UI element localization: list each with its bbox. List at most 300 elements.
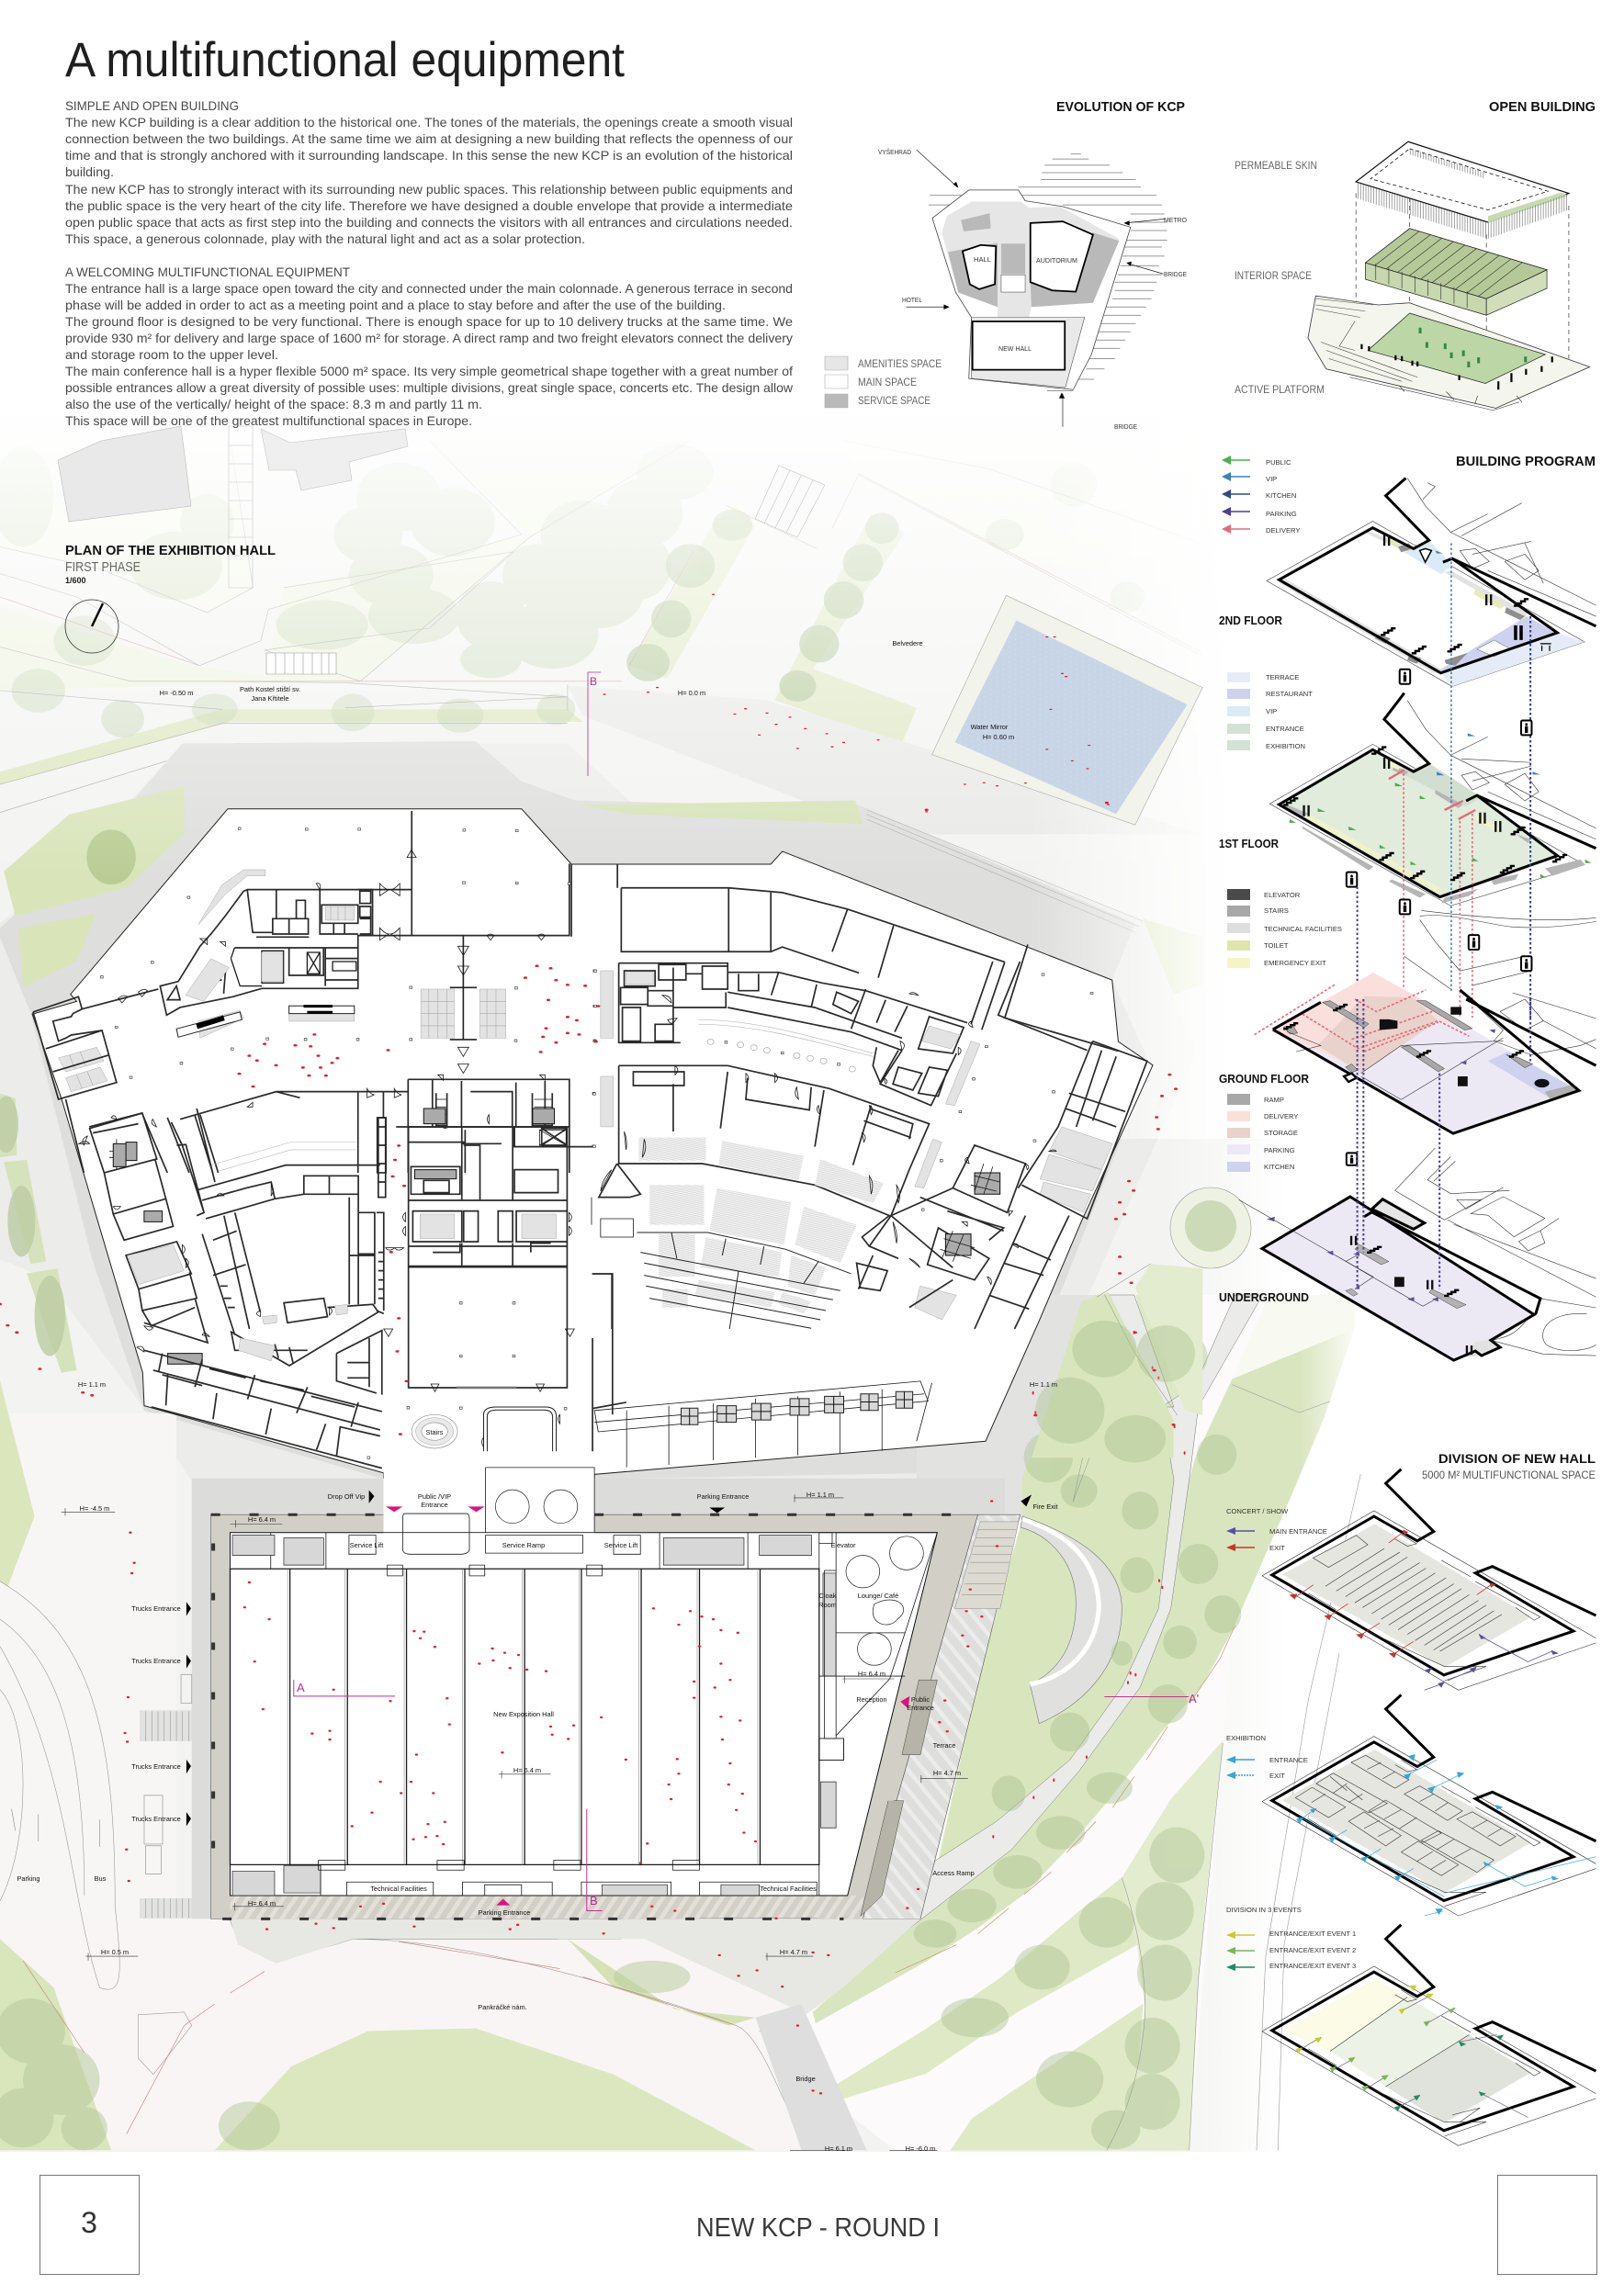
curved corridor walls [673, 962, 1088, 1106]
event three field [1386, 2035, 1531, 2123]
plan heading [65, 543, 276, 585]
round plaza basin [483, 1407, 557, 1462]
heading: division of new hall: DIVISION OF NEW HALL [1438, 1452, 1596, 1466]
underground ramp grey [1346, 1244, 1466, 1309]
section line A prime [1104, 1695, 1189, 1697]
delivery truck icon [1450, 1007, 1461, 1015]
division legends: EXHIBITION [1226, 1734, 1266, 1742]
dark toilet block [945, 1173, 1000, 1255]
legend: circulation: KITCHEN [1266, 491, 1296, 500]
exhibition stands [1295, 1755, 1516, 1875]
people [1361, 344, 1552, 389]
fins right [1488, 193, 1569, 239]
seating [638, 1138, 884, 1313]
floor labels: 2ND FLOOR [1219, 613, 1283, 627]
text block: a welcoming multifunctional equipment: phase will be added in order to act as a meeting point and a place to stay before and after the use of the building. [65, 298, 726, 312]
legend: ground floor program: STORAGE [1264, 1129, 1298, 1137]
legend: ground floor program: RAMP [1264, 1096, 1284, 1104]
pillars [211, 1543, 215, 1858]
parking entrance label: Parking Entrance [479, 1908, 530, 1917]
exit icon [1400, 900, 1410, 914]
outline [932, 190, 1131, 389]
legend: circulation: DELIVERY [1266, 526, 1300, 535]
paved ground [0, 404, 1624, 2152]
lawn north-east corner [1232, 1295, 1355, 1379]
stair ladder [229, 426, 253, 588]
terrace table icon [1540, 644, 1551, 651]
evolution labels: AUDITORIUM [1036, 256, 1077, 264]
heading: division of new hall [1422, 1452, 1596, 1481]
trucks entrance label: Trucks Entrance [131, 1657, 181, 1665]
legend: facilities: STAIRS [1264, 906, 1289, 915]
interior volume top [1365, 229, 1547, 298]
delivery vertical route two [1459, 821, 1460, 1018]
grey forecourt and colonnade [0, 741, 1202, 1481]
division legends: ENTRANCE/EXIT EVENT 1 [1269, 1930, 1356, 1938]
blue vertical route [1450, 543, 1452, 993]
bus label: Bus [95, 1874, 107, 1883]
level label: H= 0.0 m [678, 689, 705, 697]
path name label: Path Kostel stiští sv. [240, 685, 300, 693]
public entrance label second line: Entrance [421, 1501, 448, 1509]
2nd floor terrace [1441, 633, 1585, 686]
ground floor notch [1344, 1074, 1357, 1082]
east lawns and paths [804, 1295, 1360, 2150]
technical facilities label: Technical Facilities [370, 1885, 427, 1893]
platform edge [1349, 377, 1522, 411]
plaza below [231, 1919, 920, 2015]
legend: ground floor program [1227, 1094, 1298, 1172]
lawn beside hall [938, 1295, 1174, 1861]
door marks [79, 1115, 574, 1446]
2nd floor technical strips [1279, 531, 1528, 673]
service lift label: Service Lift [350, 1541, 383, 1549]
public entrance label: Public [911, 1695, 930, 1704]
text block: a welcoming multifunctional equipment: possible entrances allow a great diversity of possible uses: multiple divisions, great single space, concerts etc. The design allow [65, 381, 793, 395]
diagonal lobby wall [66, 890, 412, 1173]
plan heading: FIRST PHASE [65, 559, 141, 575]
service strip north [231, 1468, 832, 1569]
paved path with people [568, 686, 1202, 834]
level label: H= 1.1 m [78, 1380, 106, 1389]
square name label: Pankráčké nám. [478, 2003, 527, 2011]
delivery vertical route one [1403, 773, 1404, 996]
underground annex [1371, 1199, 1425, 1229]
ramp stairs south [700, 1522, 1019, 1934]
west block shell [160, 890, 373, 1015]
wing corridor walls [172, 1109, 386, 1335]
upper hall [412, 811, 570, 936]
west lobby walls [336, 1274, 626, 1469]
bridge label: Bridge [795, 2075, 816, 2083]
lounge label: Lounge/ Café [858, 1592, 898, 1600]
level label: H= 4.7 m [780, 1948, 807, 1956]
roof inner opening [1370, 149, 1548, 209]
active platform [1308, 296, 1590, 408]
neighbouring buildings [58, 426, 191, 522]
fade overlay right upper [1029, 404, 1624, 1139]
legend: facilities: EMERGENCY EXIT [1264, 959, 1326, 967]
parking icon [1458, 1076, 1468, 1086]
stair icons [1283, 599, 1567, 880]
evolution legend: MAIN SPACE [858, 377, 917, 388]
event one heads [1295, 1986, 1434, 2054]
lawn strip six [951, 2004, 1144, 2150]
text block: a welcoming multifunctional equipment: also the use of the vertically/ height of the space: 8.3 m and partly 11 m. [65, 398, 482, 411]
division legends: ENTRANCE/EXIT EVENT 3 [1269, 1962, 1356, 1970]
floor labels [1219, 613, 1310, 1304]
east road base [804, 1295, 1263, 2150]
evolution labels: HALL [974, 255, 991, 264]
interior volume side right [1486, 270, 1547, 315]
core left [619, 963, 727, 1042]
lounge tables two [890, 1536, 923, 1570]
grey lobby stairs [601, 971, 1112, 1320]
event dividers [1330, 1997, 1480, 2122]
south ramp [355, 1919, 621, 1939]
evolution labels: BRIDGE [1164, 270, 1187, 278]
elevator icon [1347, 872, 1357, 887]
corridor ticks [220, 1127, 386, 1308]
level label: H= 6.4 m [513, 1766, 541, 1774]
2nd floor stairs grey [1375, 543, 1525, 666]
west corner block [33, 996, 117, 1099]
top pillars [211, 1514, 978, 1919]
toilet icons underground [1350, 1236, 1472, 1355]
east road red edges [896, 1626, 1235, 1973]
level label: H= 6.1 m [825, 2144, 852, 2153]
hall [963, 245, 996, 289]
amenities area [942, 202, 1119, 318]
heading: open building: OPEN BUILDING [1489, 99, 1596, 115]
seating rows [1325, 1548, 1502, 1651]
water mirror label: Water Mirror [971, 723, 1009, 731]
plaza round tables [495, 1490, 529, 1524]
section A label: A [297, 1681, 305, 1694]
exploded dashed guides [1356, 156, 1569, 396]
legend: upper floor program: TERRACE [1266, 673, 1299, 681]
plan heading: 1/600 [65, 576, 86, 585]
lawn north fork [1135, 1295, 1199, 1407]
lounge bar [873, 1600, 904, 1625]
stamp box [1497, 2175, 1596, 2274]
public arrows [1290, 782, 1591, 878]
white plaza in front [384, 1451, 594, 1568]
open building labels [1235, 161, 1325, 396]
kitchen vertical route [1529, 616, 1531, 1018]
open building labels: PERMEABLE SKIN [1235, 161, 1317, 172]
door pairs [319, 1565, 844, 1870]
underground slab [1262, 1197, 1534, 1360]
lawn parcels left [4, 786, 184, 917]
main entrance arrows [1425, 1636, 1552, 1690]
three events layout [1262, 1925, 1596, 2145]
pale columns [707, 1039, 855, 1072]
exhibition layout [1262, 1694, 1596, 1916]
text block: simple and open building: SIMPLE AND OPEN BUILDING [65, 99, 239, 113]
kitchen [1488, 1052, 1579, 1098]
footer band [0, 2152, 1624, 2296]
fins back [1408, 148, 1485, 179]
grey room stairs [128, 1214, 557, 1361]
section line B [587, 1809, 602, 1911]
1st floor toilet strip [1305, 759, 1500, 893]
section B label: B [590, 675, 597, 688]
division legends: EXIT [1269, 1544, 1285, 1552]
east grid [592, 1164, 1000, 1329]
roads [0, 1413, 176, 2150]
road lines [0, 441, 1202, 813]
legend: circulation: VIP [1266, 475, 1277, 483]
reception label: Reception [856, 1695, 887, 1704]
open building labels: INTERIOR SPACE [1235, 271, 1312, 282]
level label: H= -4.5 m [80, 1504, 109, 1513]
elevator icon [1521, 956, 1531, 971]
delivery arrows [1389, 770, 1475, 819]
round lawn tree [1185, 1200, 1236, 1252]
division legends: EXIT [1269, 1772, 1285, 1780]
south-west row block [144, 1350, 382, 1469]
east paths [896, 1295, 1263, 1940]
level label: H= 6.4 m [248, 1899, 276, 1908]
concert arrows [1296, 1531, 1493, 1655]
building footprint [32, 809, 1153, 1528]
bridge [755, 2004, 867, 2150]
pale plaza line [699, 1019, 873, 1056]
ground floor storage [1318, 996, 1438, 1074]
section B label: B [590, 1894, 598, 1908]
text block: a welcoming multifunctional equipment: This space will be one of the greatest multifunctional spaces in Europe. [65, 414, 472, 428]
circular ramp [1021, 1516, 1122, 1724]
legend: upper floor program: RESTAURANT [1266, 690, 1313, 698]
cars bus [12, 1674, 192, 1874]
parking label: Parking [17, 1874, 40, 1883]
left and south landscape [0, 1381, 813, 2150]
underground annex two [1466, 1340, 1500, 1357]
north compass [65, 600, 118, 653]
round stairs [412, 1414, 457, 1448]
toilets dark [113, 1109, 555, 1364]
elevator label: Elevator [830, 1541, 856, 1549]
2nd floor icons [1420, 548, 1431, 562]
belvedere label: Belvedere [892, 639, 923, 647]
escalator black bands [197, 1007, 333, 1028]
text block: a welcoming multifunctional equipment: The entrance hall is a large space open toward the city and connected under the main colonnade. A generous terrace in second [65, 282, 793, 296]
title: A multifunctional equipment [65, 33, 625, 87]
auditorium [1031, 221, 1093, 292]
new exposition hall label: New Exposition Hall [493, 1710, 554, 1718]
text block: simple and open building: The new KCP has to strongly interact with its surrounding new public spaces. This relationship between public equipments and [65, 183, 793, 197]
text block: a welcoming multifunctional equipment: and storage room to the upper level. [65, 348, 278, 362]
plan heading: PLAN OF THE EXHIBITION HALL [65, 543, 276, 558]
heading: building program: BUILDING PROGRAM [1456, 454, 1596, 469]
page number box: 3 [81, 2206, 97, 2239]
crossing and stairs [140, 1710, 206, 1919]
exhibition bays [231, 1569, 819, 1864]
elevator icon [1400, 670, 1410, 684]
ground floor top context [1404, 919, 1596, 1019]
lawn lower curve [1107, 1740, 1223, 2150]
lower hall [409, 1267, 567, 1388]
seating row lines [637, 1232, 851, 1329]
open building labels: ACTIVE PLATFORM [1235, 385, 1325, 396]
lower hall gate [457, 1387, 516, 1389]
south-west quadrant [79, 1109, 626, 1469]
trucks entrance label: Trucks Entrance [131, 1762, 181, 1771]
columns [593, 970, 1093, 1210]
legend: upper floor program [1227, 672, 1313, 750]
door marks [601, 993, 1056, 1285]
1st floor entrance [1401, 763, 1482, 806]
open building axonometric [1308, 141, 1590, 411]
division legends: ENTRANCE [1269, 1756, 1308, 1764]
level label: H= 6.4 m [858, 1670, 885, 1678]
level label: H= 6.4 m [248, 1515, 276, 1524]
event three heads [1394, 2035, 1504, 2111]
delivery vertical route three [1472, 814, 1473, 1018]
central bars [450, 936, 477, 1040]
upper stair [266, 653, 336, 674]
restaurant icon [1516, 625, 1521, 640]
1st floor grey patches [1280, 766, 1585, 903]
pale stair hatch [211, 1142, 356, 1171]
event two field [1330, 1997, 1469, 2087]
concert layout [1262, 1469, 1596, 1690]
floor labels: 1ST FLOOR [1219, 837, 1280, 850]
west block rooms [167, 890, 371, 1000]
service area [948, 213, 1119, 307]
south hatched arcade [231, 1896, 863, 1919]
platform steps [1315, 298, 1417, 381]
1st floor outer slab [1269, 744, 1585, 906]
platform green field [1368, 313, 1545, 384]
legend: ground floor program: KITCHEN [1264, 1163, 1294, 1171]
grey stairs [59, 870, 506, 1092]
black arrow markers [186, 1491, 1032, 1826]
evolution legend: SERVICE SPACE [858, 396, 930, 407]
building program floors lower [1239, 973, 1596, 1360]
path name second line: Jana Křtitele [251, 694, 289, 703]
2nd floor outer slab [1267, 522, 1585, 686]
vertical routes lower [1358, 999, 1530, 1289]
service lift label: Service Lift [604, 1541, 637, 1549]
evolution labels: NEW HALL [998, 344, 1032, 353]
east people [991, 1331, 1186, 1839]
hall interior [231, 1533, 937, 1896]
1st floor context lines [1407, 701, 1596, 928]
text block: simple and open building: time and that is strongly anchored with it surrounding landscape. In this sense the new KCP is an evolution of the historical [65, 149, 793, 163]
trees on field [1420, 328, 1526, 367]
level label: H= 4.7 m [933, 1769, 961, 1777]
legend: ground floor program: PARKING [1264, 1146, 1295, 1154]
trucks entrance label: Trucks Entrance [131, 1815, 181, 1823]
ground floor context [1469, 999, 1596, 1054]
arrows [907, 150, 1165, 427]
level markers [62, 1494, 968, 2150]
legend: upper floor program: VIP [1266, 707, 1277, 715]
fade overlay right middle [1167, 1139, 1624, 2152]
drop off label: Drop Off Vip [328, 1492, 365, 1501]
round lawn [1170, 1187, 1251, 1268]
2nd floor walls [1279, 478, 1596, 673]
division legends: MAIN ENTRANCE [1269, 1527, 1327, 1536]
concert floor [1282, 1524, 1531, 1668]
2nd floor VIP [1404, 540, 1452, 574]
level label: H= 1.1 m [1030, 1380, 1057, 1389]
grey street band [192, 1479, 1005, 1919]
division legends: CONCERT / SHOW [1226, 1507, 1289, 1515]
central core [396, 1079, 596, 1173]
stair tread lines [700, 1530, 1016, 1931]
kitchen cross [231, 948, 356, 986]
heading: evolution of KCP: EVOLUTION OF KCP [1056, 99, 1185, 115]
level label: H= -6.0 m [906, 2144, 935, 2153]
lawn strip east of path [813, 1329, 1355, 2023]
evolution labels [878, 148, 1187, 431]
text block: simple and open building: building. [65, 165, 114, 179]
stairs label: Stairs [426, 1428, 444, 1436]
east bottom rows [594, 1381, 932, 1468]
ramp white edge [1022, 1519, 1099, 1684]
east trees [914, 1322, 1241, 2149]
trucks entrance label: Trucks Entrance [131, 1604, 181, 1613]
2nd floor context lines [1407, 478, 1596, 616]
underground walls [1262, 1197, 1540, 1360]
hatched surroundings [929, 154, 1167, 391]
legend: facilities [1227, 889, 1342, 968]
east terrace band [863, 1514, 1021, 1919]
section line A [294, 1680, 395, 1696]
2nd floor white hole [1477, 640, 1511, 657]
kitchen grey [1545, 1085, 1579, 1098]
lower amenity [972, 318, 1085, 388]
plan labels [17, 639, 1199, 2153]
text block: simple and open building: connection between the two buildings. At the same time we aim at designing a new building that reflects the openness of our [65, 132, 793, 146]
text block: simple and open building: This space, a generous colonnade, play with the natural light and act as a solar protection. [65, 232, 585, 246]
arrow heads [943, 182, 1132, 399]
lawns [215, 2029, 755, 2150]
legend: ground floor program: DELIVERY [1264, 1112, 1298, 1120]
legend: upper floor program: ENTRANCE [1266, 725, 1304, 733]
page number box [40, 2175, 140, 2274]
taupe colonnade band [211, 1514, 978, 1919]
evolution labels: VYŠEHRAD [878, 148, 911, 156]
section line B top [588, 672, 601, 776]
north-west quadrant [33, 811, 596, 1173]
division diagrams [1262, 1469, 1596, 2145]
kitchen icon [1534, 1079, 1550, 1087]
division legends: ENTRANCE/EXIT EVENT 2 [1269, 1946, 1356, 1954]
entrance arrows [386, 1506, 909, 1906]
delivery routes [1255, 984, 1469, 1052]
north-east quadrant [592, 962, 1147, 1329]
forklift icon [1380, 1019, 1397, 1030]
elevator icon [1521, 720, 1531, 735]
toilet icons [1303, 535, 1501, 832]
legend: upper floor program: EXHIBITION [1266, 742, 1305, 750]
exhibition heads [1296, 1754, 1559, 1915]
evolution legend [825, 356, 942, 408]
exit icon [1469, 935, 1479, 950]
heading: division of new hall: 5000 M² MULTIFUNCTIONAL SPACE [1422, 1469, 1596, 1481]
parking entrance label: Parking Entrance [697, 1492, 749, 1501]
ground floor thin routes [1287, 1031, 1504, 1099]
new hall [973, 321, 1065, 370]
door marks [83, 850, 545, 1145]
stair grey north [232, 1536, 836, 1896]
legend: facilities: TECHNICAL FACILITIES [1264, 925, 1342, 933]
north-east lawns [1032, 1264, 1202, 1462]
